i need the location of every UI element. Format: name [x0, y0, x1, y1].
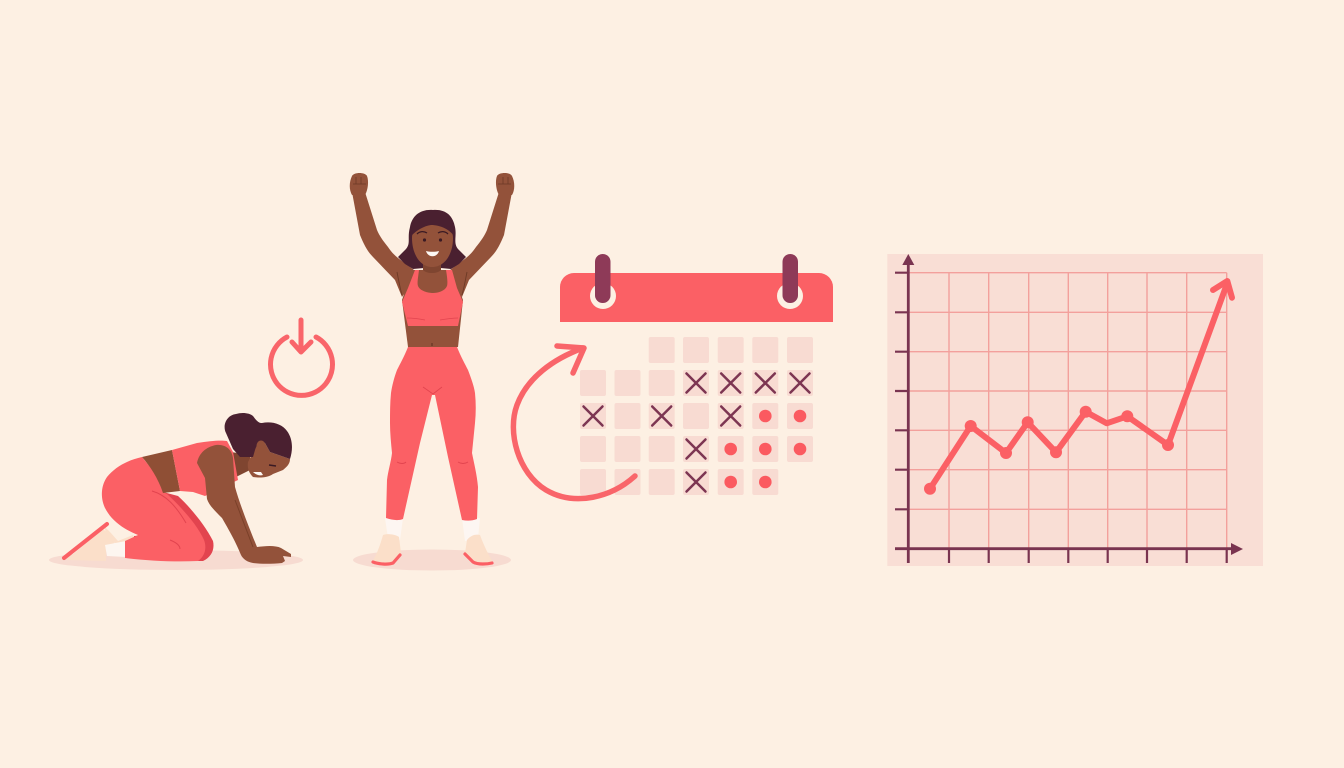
leggings: [386, 347, 478, 521]
hair: [398, 210, 466, 269]
torso skin: [402, 270, 463, 347]
sneaker: [64, 524, 148, 561]
chart axes: [895, 262, 1232, 563]
midriff: [142, 450, 180, 493]
head: [225, 413, 292, 478]
sneakers: [372, 534, 493, 564]
neck: [231, 452, 250, 478]
chart grid: [908, 273, 1227, 549]
line chart: rising progress: [887, 254, 1263, 566]
completed days: dots: [724, 410, 806, 488]
calendar rings: [595, 254, 798, 303]
missed days: crosses: [584, 374, 810, 492]
leggings: [102, 457, 214, 561]
calendar: [560, 254, 833, 495]
figure: kneeling woman: [49, 413, 303, 570]
icon: power symbol with down arrow: [270, 320, 332, 395]
axis arrowheads: [902, 254, 1243, 555]
chart panel: [887, 254, 1263, 566]
trend line: [924, 281, 1232, 495]
raised arms: [350, 173, 514, 297]
arm and hand: [197, 445, 291, 564]
figure: standing woman with raised arms: [350, 173, 514, 570]
sports bra: [402, 270, 463, 326]
calendar header: [560, 273, 833, 322]
face: [411, 214, 454, 267]
socks: [385, 518, 480, 541]
calendar day cells: [580, 337, 813, 495]
sports top: [172, 441, 238, 496]
arrow: circular restart arrow: [513, 346, 635, 499]
